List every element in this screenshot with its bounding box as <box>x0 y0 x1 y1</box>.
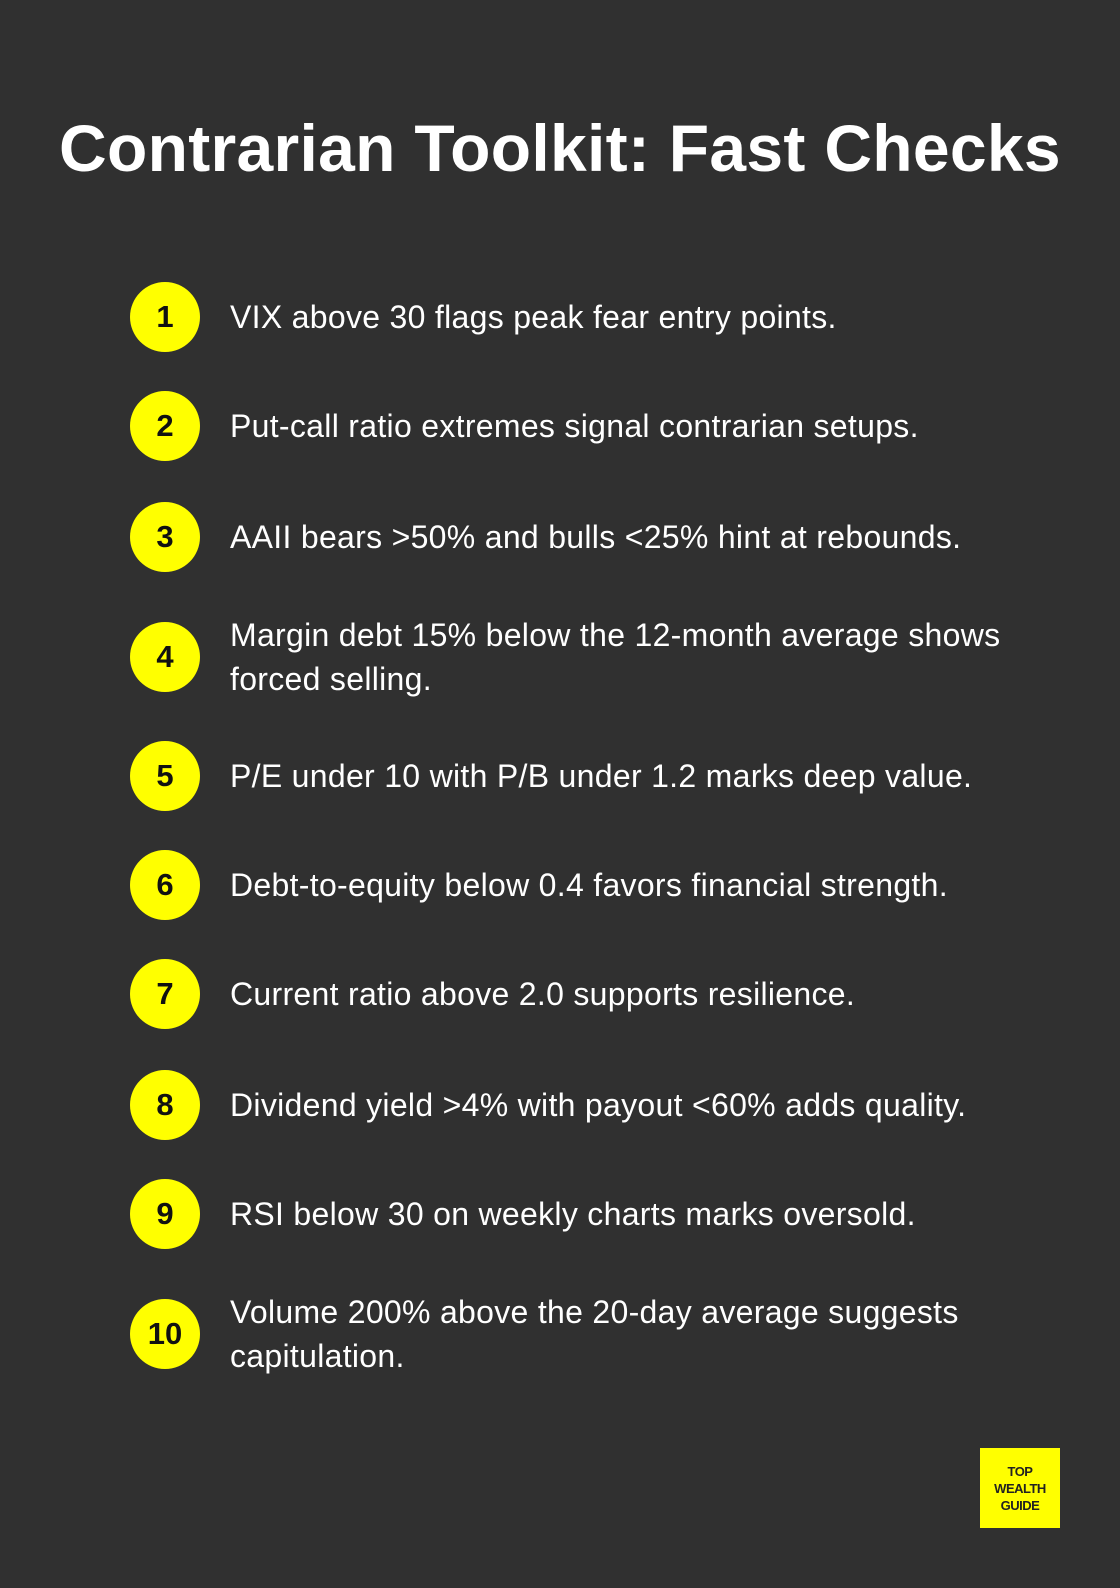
item 5: P/E under 10 with P/B under 1.2 marks deep value. <box>230 758 972 794</box>
item 2: Put-call ratio extremes signal contrarian setups. <box>230 408 919 444</box>
item 4: Margin debt 15% below the 12-month average shows <box>230 617 1000 653</box>
item 8: 8 <box>156 1087 174 1122</box>
item 8: Dividend yield >4% with payout <60% adds quality. <box>230 1087 966 1123</box>
item 6: Debt-to-equity below 0.4 favors financial strength. <box>230 867 948 903</box>
item 9: 9 <box>156 1196 174 1231</box>
item 3: 3 <box>156 519 174 554</box>
item 5 <box>130 741 972 811</box>
logo: GUIDE <box>1001 1498 1039 1512</box>
logo: WEALTH <box>994 1480 1046 1496</box>
item 1: VIX above 30 flags peak fear entry points. <box>230 299 837 335</box>
item 4: 4 <box>156 639 174 674</box>
item 10: capitulation. <box>230 1338 405 1374</box>
item 7: 7 <box>156 976 174 1011</box>
item 6: 6 <box>156 867 174 902</box>
item 3: AAII bears >50% and bulls <25% hint at rebounds. <box>230 519 961 555</box>
item 7: Current ratio above 2.0 supports resilience. <box>230 976 855 1012</box>
item 10: Volume 200% above the 20-day average suggests <box>230 1294 959 1330</box>
item 1 <box>130 282 837 352</box>
item 8 <box>130 1070 966 1140</box>
item 4: forced selling. <box>230 661 432 697</box>
logo: TOP <box>1007 1464 1032 1478</box>
item 10 <box>130 1294 959 1374</box>
item 5: 5 <box>156 758 174 793</box>
item 2 <box>130 391 919 461</box>
item 9 <box>130 1179 916 1249</box>
title: Contrarian Toolkit: Fast Checks <box>59 111 1061 185</box>
item 7 <box>130 959 855 1029</box>
item 1: 1 <box>156 299 174 334</box>
item 3 <box>130 502 961 572</box>
logo <box>980 1448 1060 1528</box>
item 4 <box>130 617 1000 697</box>
item 9: RSI below 30 on weekly charts marks oversold. <box>230 1196 916 1232</box>
item 6 <box>130 850 948 920</box>
item 2: 2 <box>156 408 174 443</box>
item 10: 10 <box>148 1316 182 1351</box>
